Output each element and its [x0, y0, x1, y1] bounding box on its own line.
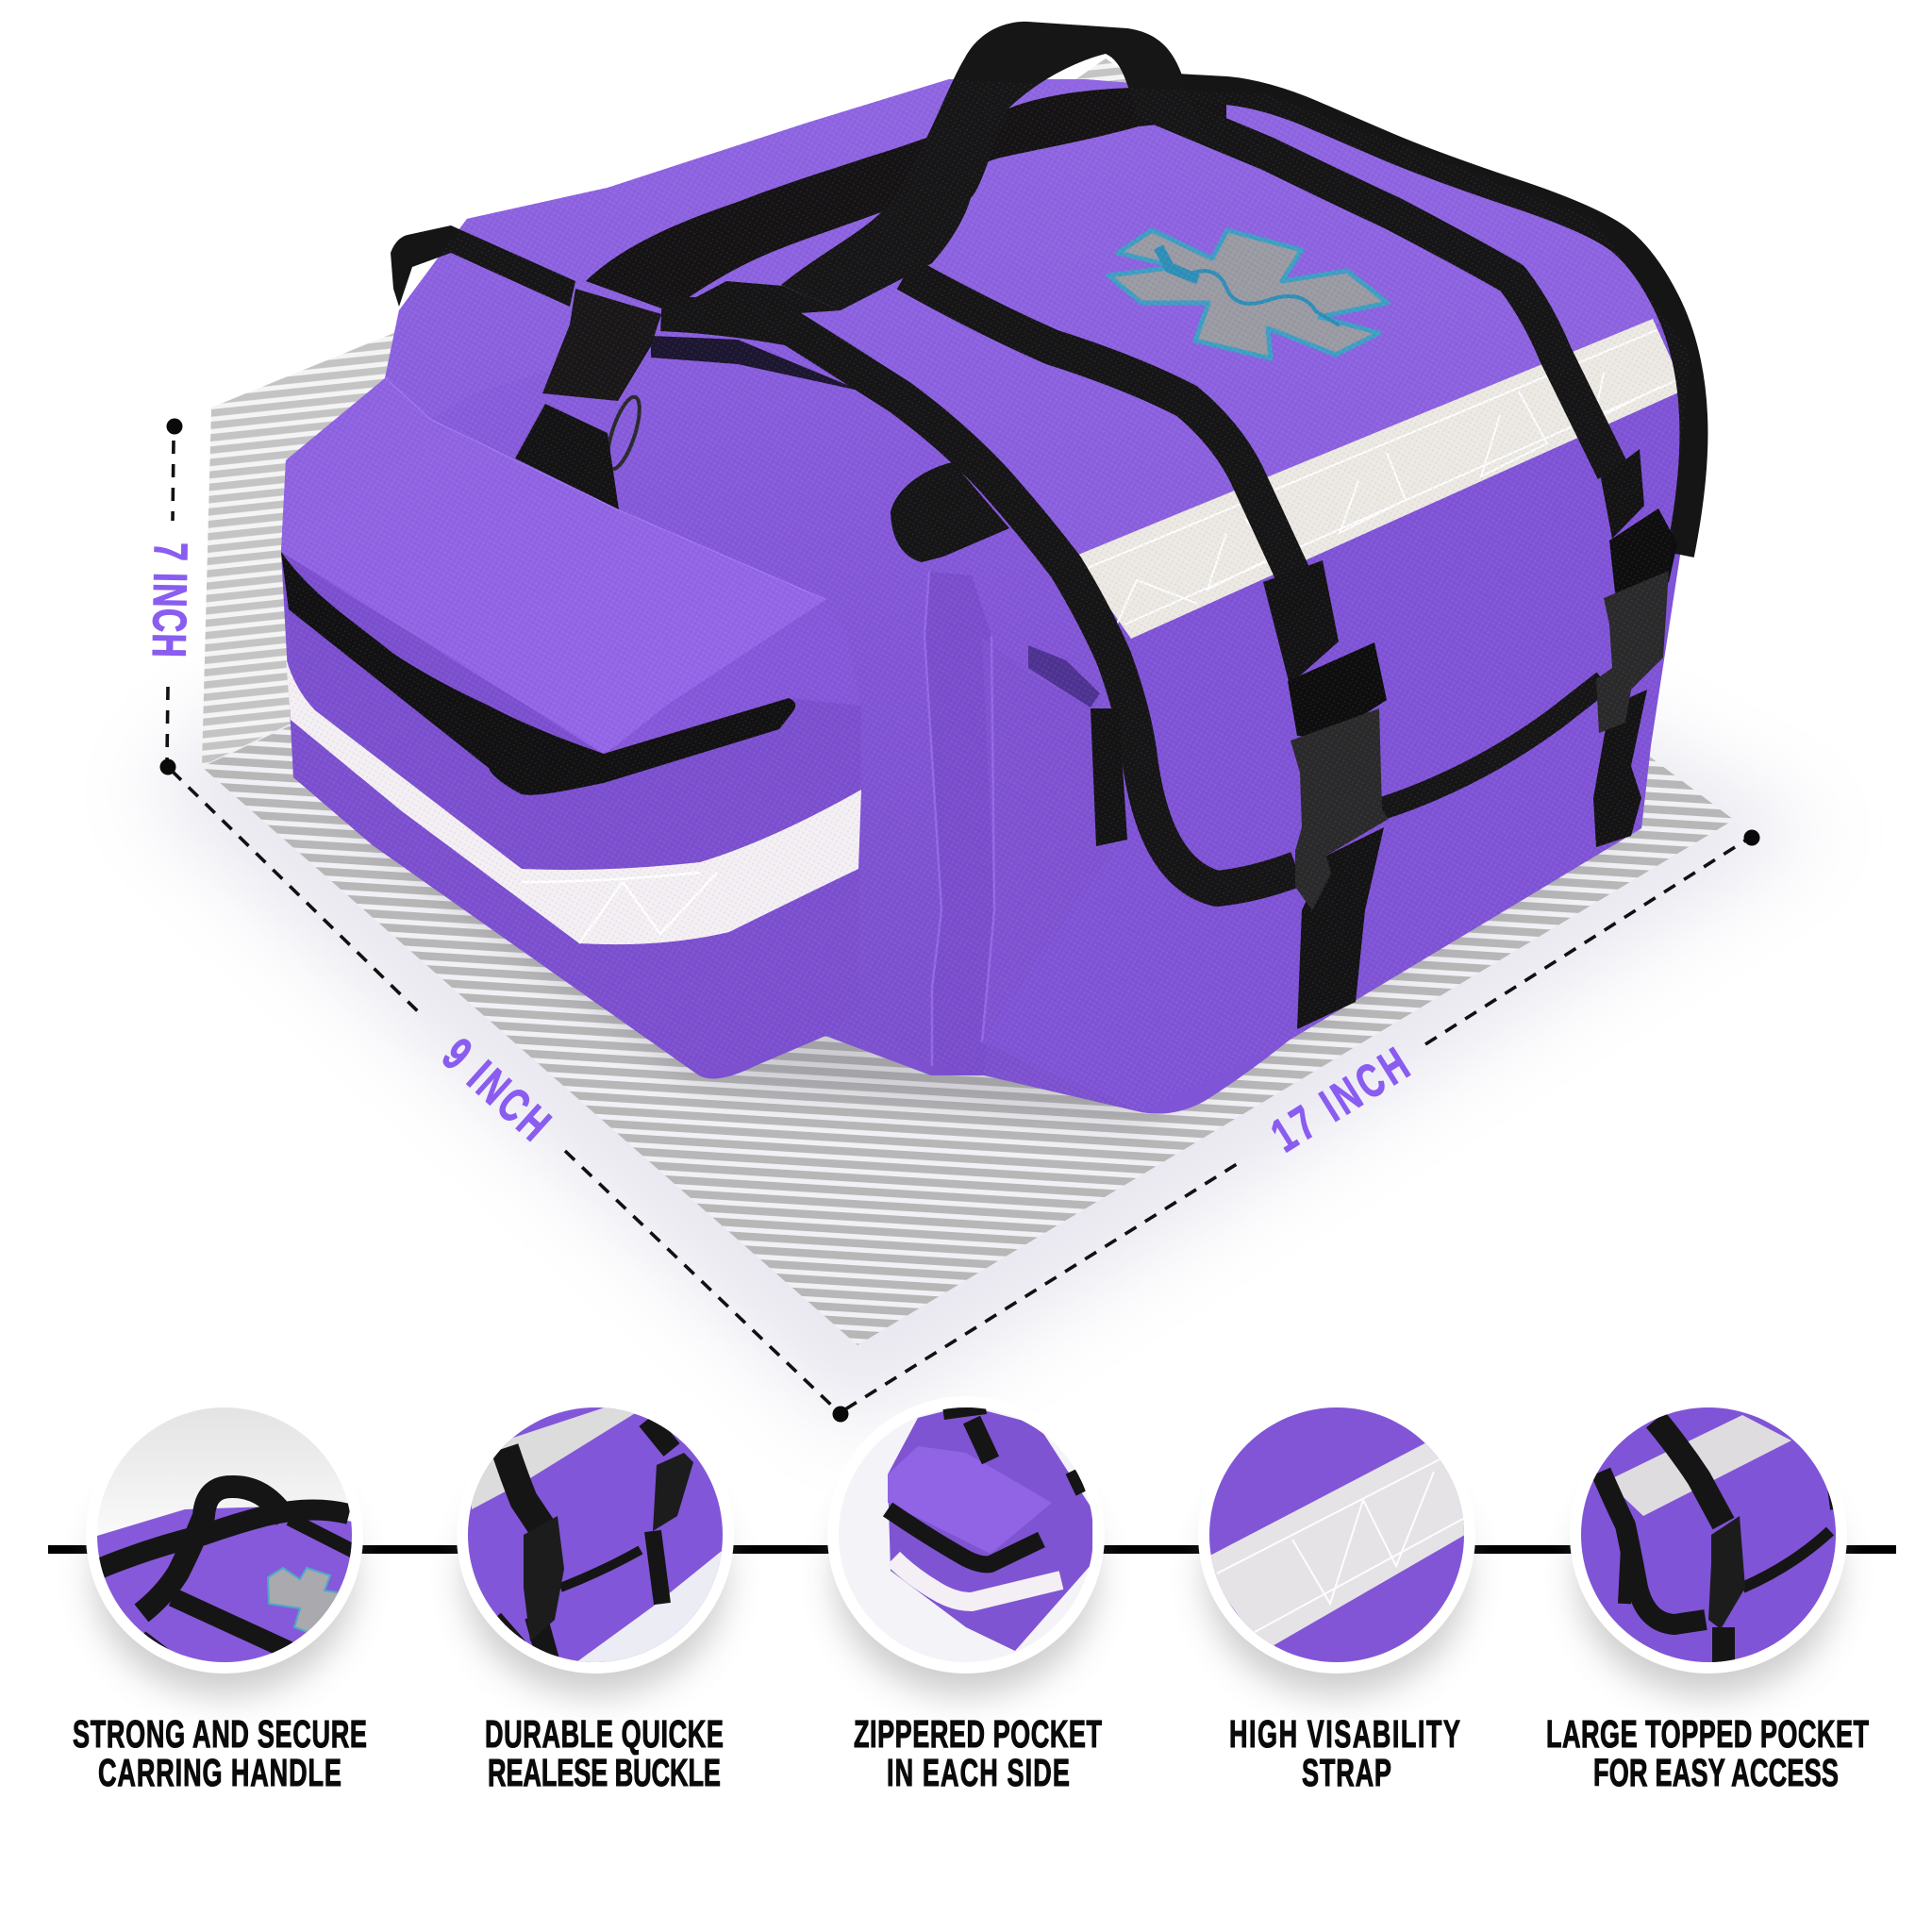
d-ring: [601, 393, 646, 473]
bag shadow on floor: [311, 792, 1651, 1123]
label: top pocket: [1546, 1714, 1869, 1794]
doubled strap section left: [1263, 560, 1339, 685]
label: buckle: DURABLE QUICKE: [485, 1714, 724, 1756]
bag body: [281, 79, 1696, 1113]
side grab tab: [891, 462, 1009, 562]
ring strap: [542, 289, 661, 401]
interior shadow under lid: [651, 336, 863, 391]
label: handle: CARRING HANDLE: [98, 1753, 341, 1794]
length label: 17 INCH: [1263, 1039, 1418, 1162]
height label: 7 INCH: [142, 542, 196, 658]
fabric texture: [281, 79, 1690, 1112]
label: zippered pocket: ZIPPERED POCKET: [854, 1714, 1102, 1756]
lower ring tab: [515, 404, 619, 509]
label: buckle: [485, 1714, 724, 1794]
side panel between pocket and lid: [430, 321, 1123, 1075]
feature circle: buckle: [457, 1396, 734, 1695]
wide back band: [586, 88, 1226, 310]
feature circle: top pocket: [1570, 1396, 1847, 1695]
hatched wall plane: [202, 332, 396, 766]
front lower shading: [982, 390, 1685, 1113]
outer edge strap: [1160, 87, 1693, 555]
buckle right: [1596, 508, 1677, 733]
hatched wall seen through handle: [1061, 58, 1146, 90]
feature circle: strap: [1198, 1396, 1476, 1695]
depth label: 9 INCH: [432, 1029, 559, 1151]
star of life emblem: [1108, 230, 1388, 358]
pocket flap front: [604, 600, 861, 754]
side sleeve pocket: [982, 638, 1127, 1042]
sleeve interior shadow: [1028, 645, 1100, 708]
back left strap: [391, 225, 575, 307]
pocket reflective strip: [286, 658, 861, 944]
carry handle: [781, 22, 1208, 310]
label: strap: STRAP: [1302, 1753, 1391, 1794]
feature circle: handle: [86, 1396, 363, 1695]
right strap: [1139, 100, 1613, 472]
side seam column: [924, 572, 994, 1075]
label: handle: [73, 1714, 367, 1794]
label: zippered pocket: IN EACH SIDE: [887, 1753, 1070, 1794]
lower strap left: [1297, 827, 1384, 1029]
flap seam: [385, 378, 825, 600]
lower strap right: [1593, 690, 1647, 847]
pocket top flap: [281, 378, 825, 754]
feature circle: zippered pocket: [827, 1396, 1105, 1695]
main bag illustration: [281, 22, 1696, 1113]
label: top pocket: LARGE TOPPED POCKET: [1546, 1714, 1869, 1756]
thin cross strap: [1379, 681, 1604, 809]
lid edge strap: [661, 313, 1297, 889]
reflective top strip: [1074, 319, 1685, 639]
dimension: depth: [172, 771, 836, 1409]
middle strap: [906, 274, 1307, 604]
timeline bar: [48, 1545, 1896, 1554]
label: strap: [1229, 1714, 1460, 1794]
short black tab: [1091, 708, 1127, 846]
hatched floor plane: [202, 717, 1734, 1345]
soft floor shadow: [142, 660, 1821, 1434]
label: zippered pocket: [854, 1714, 1102, 1794]
pocket front face: [281, 552, 861, 1078]
zippered side pocket: [281, 378, 861, 1078]
bag lid top: [385, 79, 1670, 558]
label: strap: HIGH VISABILITY: [1229, 1714, 1460, 1756]
dimension: length: [832, 830, 1760, 1423]
label: handle: STRONG AND SECURE: [73, 1714, 367, 1756]
pocket zipper: [281, 552, 795, 795]
doubled strap section right: [1601, 449, 1644, 539]
buckle left: [1288, 642, 1389, 910]
dimension: height: [142, 419, 196, 775]
label: top pocket: FOR EASY ACCESS: [1593, 1753, 1839, 1794]
handle yoke band: [660, 281, 841, 319]
seam lines: [924, 572, 994, 1066]
label: buckle: REALESE BUCKLE: [488, 1753, 721, 1794]
